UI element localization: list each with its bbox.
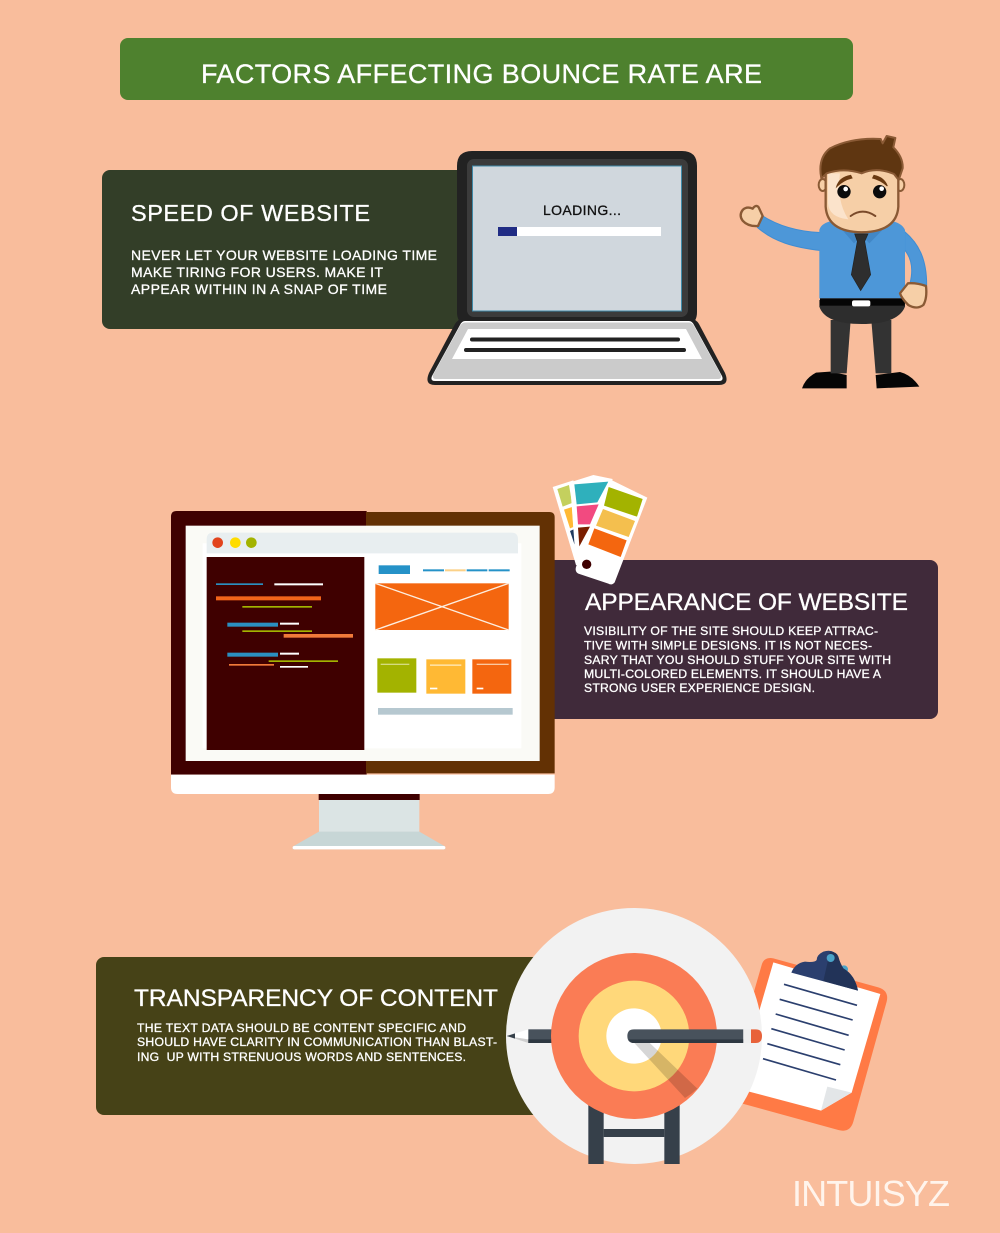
face	[826, 167, 898, 232]
text block: speed of website	[131, 247, 437, 297]
mouth	[851, 212, 875, 216]
eyebrows	[837, 175, 887, 187]
icon: sad businessman	[741, 136, 927, 388]
hair	[820, 136, 903, 180]
progress bar	[498, 227, 661, 236]
icon: clipboard	[723, 951, 887, 1131]
belt	[820, 298, 905, 306]
icon: laptop loading	[427, 151, 727, 385]
back swatch card	[553, 480, 593, 565]
text block: appearance of website: STRONG USER EXPERIENCE DESIGN.	[584, 681, 815, 695]
text block: appearance of website: SARY THAT YOU SHOULD STUFF YOUR SITE WITH	[584, 653, 891, 667]
text block: transparency of content: ING UP WITH STRENUOUS WORDS AND SENTENCES.	[137, 1050, 466, 1064]
panel: appearance of website	[530, 560, 938, 719]
loading label: LOADING...	[543, 202, 621, 218]
front swatch card	[576, 479, 647, 584]
text block: appearance of website: TIVE WITH SIMPLE DESIGNS. IT IS NOT NECES-	[584, 638, 872, 652]
icon: target with pencil	[506, 908, 762, 1164]
shirt	[819, 221, 905, 298]
text block: transparency of content: THE TEXT DATA SHOULD BE CONTENT SPECIFIC AND	[137, 1021, 466, 1035]
panel: speed of website	[102, 170, 472, 329]
text block: speed of website: MAKE TIRING FOR USERS. MAKE IT	[131, 264, 383, 280]
collar shadow	[840, 227, 885, 243]
paper lines	[763, 984, 857, 1080]
clipboard board	[723, 958, 887, 1131]
legs	[831, 320, 851, 373]
brand wordmark: INTUISYZ	[792, 1173, 950, 1214]
icon: desktop monitor	[171, 511, 555, 849]
heading: appearance of website: APPEARANCE OF WEBSITE	[585, 589, 908, 616]
monitor screen	[186, 526, 540, 761]
text block: appearance of website: MULTI-COLORED ELEMENTS. IT SHOULD HAVE A	[584, 667, 882, 681]
eyes	[837, 185, 886, 198]
heading: speed of website: SPEED OF WEBSITE	[131, 200, 370, 226]
text block: speed of website: APPEAR WITHIN IN A SNAP OF TIME	[131, 281, 387, 297]
text block: appearance of website	[584, 624, 891, 695]
laptop keyboard base	[427, 319, 727, 385]
right arm	[905, 232, 927, 285]
paper fold	[821, 1087, 852, 1111]
target stand	[588, 1103, 680, 1164]
text block: transparency of content: SHOULD HAVE CLARITY IN COMMUNICATION THAN BLAST-	[137, 1035, 497, 1049]
text block: speed of website: NEVER LET YOUR WEBSITE LOADING TIME	[131, 247, 437, 263]
pointing hand	[741, 206, 763, 226]
monitor frame	[171, 511, 555, 794]
target backing disc	[506, 908, 762, 1164]
text block: transparency of content	[137, 1021, 497, 1064]
pencil shadow	[634, 1040, 697, 1098]
clip	[791, 951, 858, 991]
pencil front	[627, 1029, 762, 1043]
hips	[819, 300, 905, 324]
ears	[819, 179, 904, 191]
left pointing arm	[757, 215, 822, 251]
title banner: FACTORS AFFECTING BOUNCE RATE ARE	[201, 59, 762, 89]
shoes	[802, 372, 847, 388]
panel: transparency of content	[96, 957, 556, 1115]
target rings	[551, 953, 717, 1119]
title banner	[120, 38, 853, 100]
clipboard paper	[737, 962, 880, 1111]
heading: transparency of content: TRANSPARENCY OF CONTENT	[134, 985, 498, 1012]
middle swatch card	[570, 475, 613, 568]
monitor stand	[293, 793, 445, 849]
wireframe layout	[375, 565, 513, 715]
text block: appearance of website: VISIBILITY OF THE SITE SHOULD KEEP ATTRAC-	[584, 624, 878, 638]
tie	[851, 234, 871, 291]
code panel	[207, 557, 364, 750]
pencil tail	[507, 1029, 553, 1043]
icon: colour swatch fan	[553, 475, 647, 584]
right hand	[900, 283, 926, 307]
